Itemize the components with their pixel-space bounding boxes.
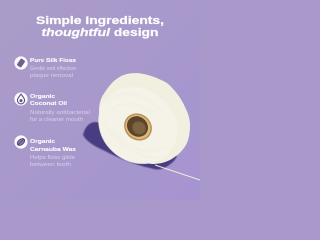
title: Simple Ingredients, [36, 15, 164, 27]
heading: organic coconut oil [30, 94, 68, 107]
feature: organic coconut oil [14, 92, 90, 123]
heading: organic carnauba wax: Carnauba Wax [30, 147, 76, 153]
description: plaque removal: Gentle and effective [30, 66, 76, 72]
heading: organic coconut oil: Coconut Oil [30, 101, 68, 107]
spool body [99, 73, 190, 164]
description: floss glide [30, 155, 75, 168]
floss spool photo [83, 71, 200, 180]
background [0, 0, 200, 200]
heading: pure silk floss: Pure Silk Floss [30, 58, 76, 64]
description: floss glide: between teeth [30, 162, 71, 168]
feature: pure silk floss [14, 56, 76, 79]
heading: organic carnauba wax: Organic [30, 139, 55, 145]
icon: oil drop [14, 92, 28, 106]
description: plaque removal: plaque removal [30, 73, 73, 79]
spool core [119, 108, 157, 146]
description: antibacterial: for a cleaner mouth [30, 117, 83, 123]
icon: wax leaf [14, 135, 28, 149]
floss string [155, 165, 200, 180]
feature: organic carnauba wax [14, 135, 76, 168]
spool shadow [83, 122, 177, 170]
icon: floss spool [14, 56, 28, 70]
description: floss glide: Helps floss glide [30, 155, 75, 161]
description: antibacterial: Naturally antibacterial [30, 110, 90, 116]
floss winding texture [104, 82, 176, 158]
title: thoughtful design [42, 27, 159, 39]
spool face [83, 71, 193, 180]
heading: organic coconut oil: Organic [30, 94, 55, 100]
title [36, 15, 164, 39]
heading: organic carnauba wax [30, 139, 76, 153]
description: antibacterial [30, 110, 90, 123]
description: plaque removal [30, 66, 76, 79]
